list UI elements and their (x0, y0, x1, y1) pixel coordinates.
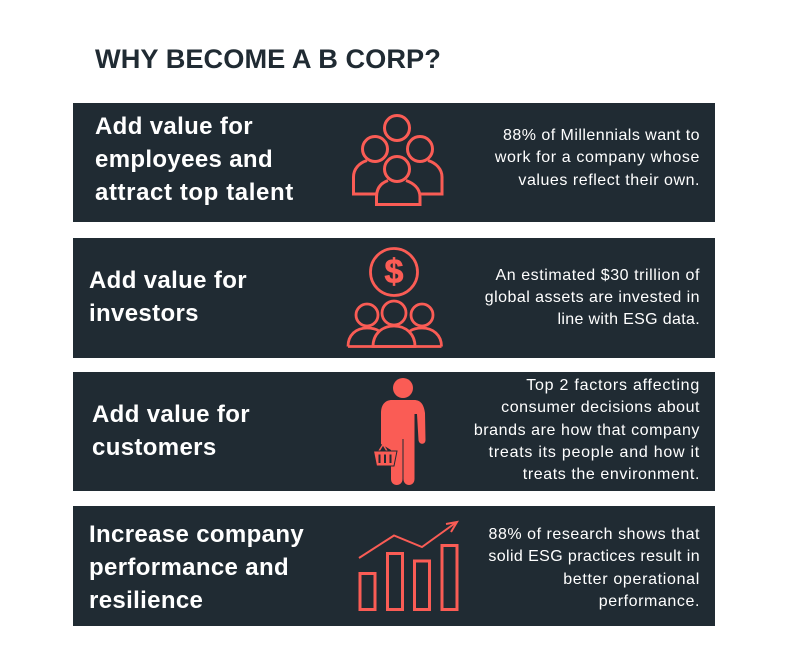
text: investors statistic: line with ESG data. (557, 311, 700, 328)
text: customers statistic: treats the environment. (523, 466, 700, 483)
icon: investors with dollar coin (348, 248, 442, 346)
panel: investors (73, 238, 715, 358)
icon: bar chart with rising arrow (359, 522, 457, 610)
heading: customers: customers (92, 434, 217, 461)
text: customers statistic (474, 377, 700, 483)
text: performance statistic: performance. (599, 593, 700, 610)
text: performance statistic: better operational (563, 571, 700, 588)
text: employees statistic: work for a company whose (495, 149, 700, 166)
panel: customers (73, 372, 715, 491)
text: performance statistic: 88% of research shows that (489, 526, 700, 543)
text: customers statistic: consumer decisions about (501, 399, 700, 416)
text: customers statistic: Top 2 factors affecting (526, 377, 700, 394)
heading: performance: performance and (89, 554, 289, 581)
text: customers statistic: brands are how that company (474, 422, 700, 439)
text: investors statistic: An estimated $30 trillion of (495, 266, 700, 284)
heading: investors: Add value for (89, 267, 247, 294)
text: employees statistic (494, 127, 700, 189)
heading: investors: investors (89, 300, 199, 327)
heading: employees: attract top talent (95, 179, 294, 206)
text: employees statistic: 88% of Millennials want to (503, 127, 700, 144)
title: WHY BECOME A B CORP? (95, 43, 441, 74)
panel: employees (73, 103, 715, 222)
heading: customers: Add value for (92, 401, 250, 428)
heading: performance: Increase company (89, 521, 304, 548)
text: investors statistic: global assets are invested in (485, 289, 700, 306)
text: performance statistic: solid ESG practices result in (488, 548, 700, 565)
heading: employees: employees and (95, 146, 273, 173)
icon: person with basket (374, 378, 426, 485)
heading: customers (92, 401, 250, 461)
text: customers statistic: treats its people and how it (489, 444, 700, 461)
text: investors statistic (485, 266, 700, 328)
heading: investors (89, 267, 247, 327)
heading: employees: Add value for (95, 113, 253, 140)
heading: performance (89, 521, 304, 614)
icon glyph: dollar sign: $ (385, 253, 404, 291)
icon: group of people (354, 116, 442, 204)
text: employees statistic: values reflect their own. (518, 172, 700, 189)
heading: performance: resilience (89, 587, 203, 614)
heading: employees (95, 113, 294, 206)
text: performance statistic (488, 526, 700, 610)
panel: performance (73, 506, 715, 626)
